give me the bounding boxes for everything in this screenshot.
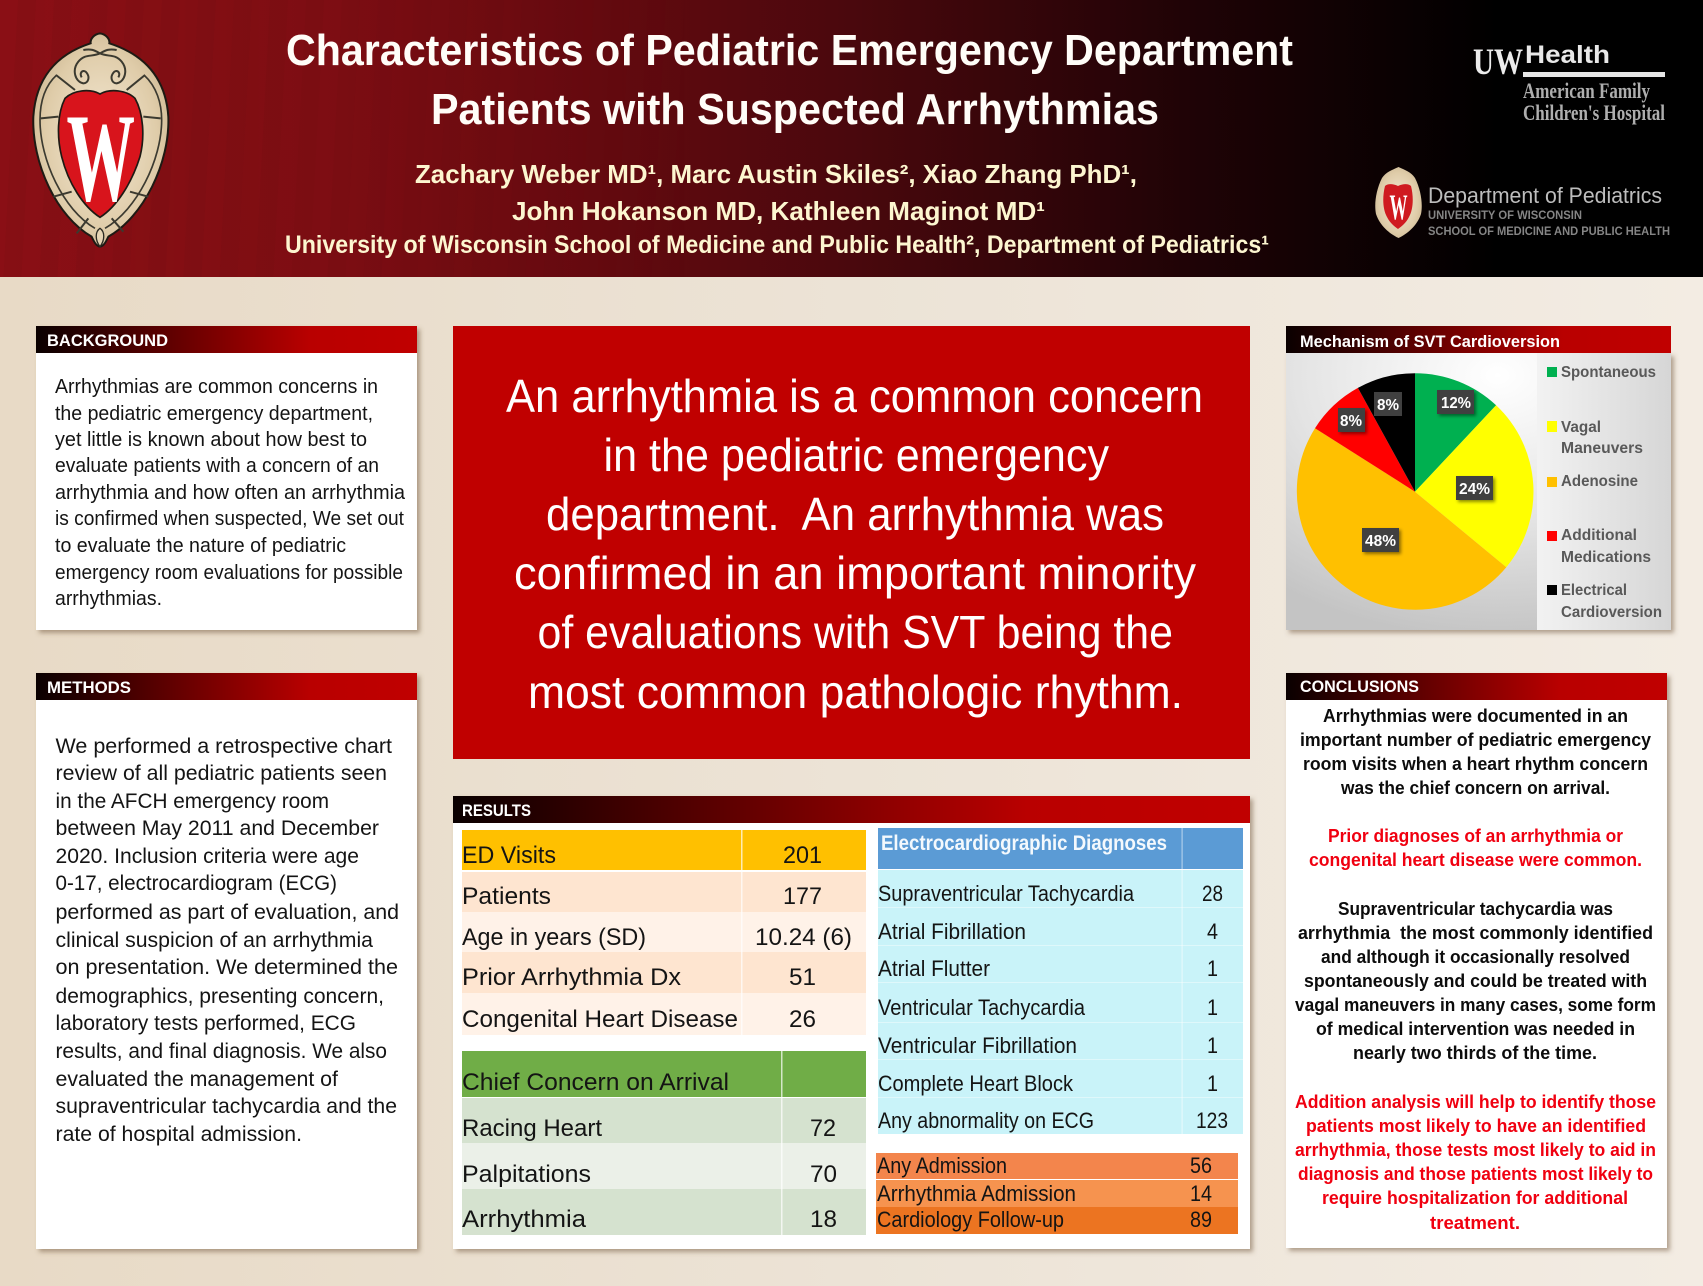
text block: methods: 0-17, electrocardiogram (ECG) [56, 872, 337, 895]
text block: conclusion three: of medical intervention was needed in [1316, 1019, 1635, 1039]
table: visit demographics: 10.24 (6) [755, 924, 852, 951]
text block: conclusion one: Arrhythmias were documented in an [1323, 706, 1628, 726]
logo: UW Health American Family Children's Hospital: Health [1525, 41, 1610, 69]
data label: 24% [1456, 476, 1493, 500]
text block: background: Arrhythmias are common concerns in [55, 376, 378, 398]
text block: background: arrhythmia and how often an arrhythmia [55, 482, 406, 504]
text block: methods: in the AFCH emergency room [56, 790, 329, 813]
table: visit demographics [462, 830, 866, 1035]
header banner [0, 0, 1703, 277]
text block: conclusion four: treatment. [1430, 1213, 1520, 1233]
text block: methods: demographics, presenting concern, [56, 985, 384, 1008]
text block: methods: clinical suspicion of an arrhythmia [56, 929, 373, 952]
text block: background: is confirmed when suspected, We set out [55, 508, 404, 530]
text block: conclusion three: Supraventricular tachycardia was [1338, 899, 1613, 919]
text block: conclusion four [1295, 1092, 1656, 1233]
text block: conclusion two: congenital heart disease were common. [1309, 850, 1642, 870]
table: chief concern on arrival: Chief Concern on Arrival [462, 1069, 729, 1096]
text block: background: emergency room evaluations for possible [55, 562, 403, 584]
text block: conclusion three: vagal maneuvers in many cases, some form [1295, 995, 1656, 1015]
heading: chart title: Mechanism of SVT Cardioversion [1300, 332, 1560, 351]
table: visit demographics: Age in years (SD) [462, 924, 646, 951]
text block: conclusion one: room visits when a heart rhythm concern [1303, 754, 1648, 774]
table: electrocardiographic diagnoses: 1 [1207, 995, 1218, 1020]
text block: conclusion four: arrhythmia, those tests most likely to aid in [1295, 1140, 1656, 1160]
text block: conclusion one: important number of pediatric emergency [1300, 730, 1651, 750]
title: Characteristics of Pediatric Emergency Department [286, 26, 1293, 75]
table: electrocardiographic diagnoses: Any abnormality on ECG [878, 1108, 1094, 1133]
chart legend: Electrical [1561, 582, 1627, 599]
icon: university crest: W [66, 89, 135, 228]
table: electrocardiographic diagnoses: 1 [1207, 1033, 1218, 1058]
data label: 8% black slice: 8% [1377, 397, 1399, 414]
text block: methods: review of all pediatric patients seen [56, 762, 387, 785]
icon: university crest [33, 33, 168, 247]
text block: methods: We performed a retrospective chart [56, 735, 392, 758]
authors and affiliations [285, 159, 1269, 259]
chart legend: Medications [1561, 549, 1651, 566]
table: visit demographics: ED Visits [462, 842, 556, 869]
text block: conclusion one [1300, 706, 1651, 798]
text block: methods: results, and final diagnosis. We also [56, 1040, 387, 1063]
text block: background: arrhythmias. [55, 588, 162, 610]
table: visit demographics: Prior Arrhythmia Dx [462, 964, 681, 991]
logo: Department of Pediatrics: SCHOOL OF MEDICINE AND PUBLIC HEALTH [1428, 224, 1670, 238]
panel: background [36, 326, 417, 630]
table: electrocardiographic diagnoses: Complete Heart Block [878, 1071, 1074, 1096]
heading: methods: METHODS [47, 678, 131, 697]
text block: conclusion four: patients most likely to have an identified [1306, 1116, 1646, 1136]
logo: UW Health American Family Children's Hospital: American Family [1523, 78, 1650, 103]
data label: 8% red slice: 8% [1340, 413, 1362, 430]
text block: background: evaluate patients with a concern of an [55, 455, 379, 477]
table: electrocardiographic diagnoses: Ventricular Fibrillation [878, 1033, 1077, 1058]
table: chief concern on arrival [462, 1051, 866, 1235]
panel: conclusions [1286, 673, 1667, 1248]
text block: methods: on presentation. We determined the [56, 956, 398, 979]
logo: UW Health American Family Children's Hospital [1473, 41, 1665, 125]
text block: conclusion three: arrhythmia the most commonly identified [1298, 923, 1653, 943]
table: chief concern on arrival: Palpitations [462, 1161, 591, 1188]
text block: background [55, 376, 406, 610]
text block: conclusion four: diagnosis and those patients most likely to [1298, 1164, 1653, 1184]
data label: 48% [1362, 528, 1399, 552]
text block: methods: between May 2011 and December [56, 817, 379, 840]
panel: methods [36, 673, 417, 1249]
table: admissions and follow-up: 56 [1190, 1153, 1212, 1178]
panel: key takeaway callout: department. An arrhythmia was [546, 488, 1164, 540]
text block: conclusion four: require hospitalization for additional [1322, 1188, 1628, 1208]
table: chief concern on arrival: Racing Heart [462, 1115, 602, 1142]
text block: methods: supraventricular tachycardia and the [56, 1095, 397, 1118]
table: admissions and follow-up: Cardiology Follow-up [877, 1207, 1064, 1232]
chart legend [1547, 364, 1662, 621]
table: visit demographics: Patients [462, 883, 551, 910]
data label: 48%: 48% [1365, 533, 1396, 550]
text block: background: to evaluate the nature of pediatric [55, 535, 346, 557]
authors and affiliations: University of Wisconsin School of Medicine and Public Health², Department of Pediatrics¹ [285, 231, 1269, 259]
text block: methods: evaluated the management of [56, 1068, 338, 1091]
text block: methods: laboratory tests performed, ECG [56, 1012, 356, 1035]
table: admissions and follow-up [876, 1153, 1238, 1234]
panel: results [453, 796, 1250, 1249]
chart legend: Adenosine [1561, 473, 1638, 490]
heading: conclusions: CONCLUSIONS [1300, 677, 1419, 696]
table: admissions and follow-up: Arrhythmia Admission [877, 1181, 1076, 1206]
text block: background: yet little is known about how best to [55, 429, 367, 451]
table: electrocardiographic diagnoses: 4 [1207, 919, 1218, 944]
table: electrocardiographic diagnoses: 123 [1196, 1108, 1228, 1133]
text block: conclusion one: was the chief concern on arrival. [1340, 778, 1610, 798]
table: electrocardiographic diagnoses: Atrial Flutter [878, 956, 990, 981]
chart legend: Cardioversion [1561, 604, 1662, 621]
table: electrocardiographic diagnoses: 1 [1207, 1071, 1218, 1096]
table: visit demographics: Congenital Heart Disease [462, 1006, 738, 1033]
title [286, 26, 1293, 134]
text block: conclusion four: Addition analysis will help to identify those [1295, 1092, 1656, 1112]
text block: methods [56, 735, 399, 1146]
table: visit demographics: 201 [783, 842, 822, 869]
chart legend: Maneuvers [1561, 440, 1643, 457]
table: visit demographics: 26 [789, 1006, 816, 1033]
chart legend: Spontaneous [1561, 364, 1656, 381]
data label: 12%: 12% [1441, 395, 1471, 412]
text block: background: the pediatric emergency department, [55, 403, 373, 425]
logo: Department of Pediatrics: Department of Pediatrics [1428, 183, 1662, 208]
data label: 8% black slice [1374, 392, 1402, 416]
text block: conclusion two [1309, 826, 1642, 870]
table: admissions and follow-up: Any Admission [877, 1153, 1007, 1178]
table: electrocardiographic diagnoses: 1 [1207, 956, 1218, 981]
logo: Department of Pediatrics: UNIVERSITY OF WISCONSIN [1428, 208, 1582, 222]
text block: conclusion three [1295, 899, 1656, 1063]
logo: UW Health American Family Children's Hospital: Children's Hospital [1523, 100, 1665, 125]
panel: key takeaway callout: in the pediatric emergency [604, 429, 1109, 481]
title: Patients with Suspected Arrhythmias [431, 85, 1159, 134]
data label: 24%: 24% [1459, 481, 1490, 498]
chart legend: Additional [1561, 527, 1637, 544]
logo: Department of Pediatrics: W [1390, 187, 1408, 227]
authors and affiliations: Zachary Weber MD¹, Marc Austin Skiles², Xiao Zhang PhD¹, [415, 159, 1137, 189]
table: chief concern on arrival: 72 [810, 1115, 836, 1142]
table: electrocardiographic diagnoses: Electrocardiographic Diagnoses [881, 832, 1167, 855]
text block: methods: performed as part of evaluation, and [56, 901, 399, 924]
table: visit demographics: 177 [783, 883, 822, 910]
heading: background: BACKGROUND [47, 331, 168, 350]
logo: Department of Pediatrics [1375, 167, 1670, 238]
table: electrocardiographic diagnoses: 28 [1202, 881, 1223, 906]
text block: methods: 2020. Inclusion criteria were age [56, 845, 359, 868]
text block: conclusion three: nearly two thirds of the time. [1353, 1043, 1597, 1063]
table: electrocardiographic diagnoses: Atrial Fibrillation [878, 919, 1026, 944]
table: electrocardiographic diagnoses: Supraventricular Tachycardia [878, 881, 1135, 906]
panel: key takeaway callout: confirmed in an important minority [514, 547, 1196, 599]
data label: 12% [1437, 390, 1474, 414]
table: electrocardiographic diagnoses [878, 828, 1243, 1134]
table: chief concern on arrival: 18 [810, 1206, 837, 1233]
chart legend: Vagal [1561, 419, 1601, 436]
text block: conclusion three: and although it occasionally resolved [1321, 947, 1630, 967]
text block: conclusion three: spontaneously and could be treated with [1304, 971, 1647, 991]
panel: key takeaway callout: of evaluations with SVT being the [538, 606, 1173, 658]
authors and affiliations: John Hokanson MD, Kathleen Maginot MD¹ [512, 196, 1045, 226]
pie chart [1297, 373, 1533, 610]
text block: conclusion two: Prior diagnoses of an arrhythmia or [1328, 826, 1623, 846]
data label: 8% red slice [1338, 408, 1365, 432]
panel: key takeaway callout: An arrhythmia is a common concern [506, 370, 1203, 422]
panel: key takeaway callout: most common pathologic rhythm. [528, 666, 1183, 718]
table: chief concern on arrival: 70 [810, 1161, 837, 1188]
table: admissions and follow-up: 89 [1190, 1207, 1212, 1232]
table: electrocardiographic diagnoses: Ventricular Tachycardia [878, 995, 1086, 1020]
table: visit demographics: 51 [789, 964, 816, 991]
text block: methods: rate of hospital admission. [56, 1123, 302, 1146]
panel: mechanism of SVT cardioversion [1286, 326, 1671, 630]
heading: results: RESULTS [462, 801, 531, 820]
panel: key takeaway callout [453, 326, 1250, 759]
table: chief concern on arrival: Arrhythmia [462, 1206, 587, 1233]
table: admissions and follow-up: 14 [1190, 1181, 1212, 1206]
logo: UW Health American Family Children's Hospital: UW [1473, 42, 1523, 83]
